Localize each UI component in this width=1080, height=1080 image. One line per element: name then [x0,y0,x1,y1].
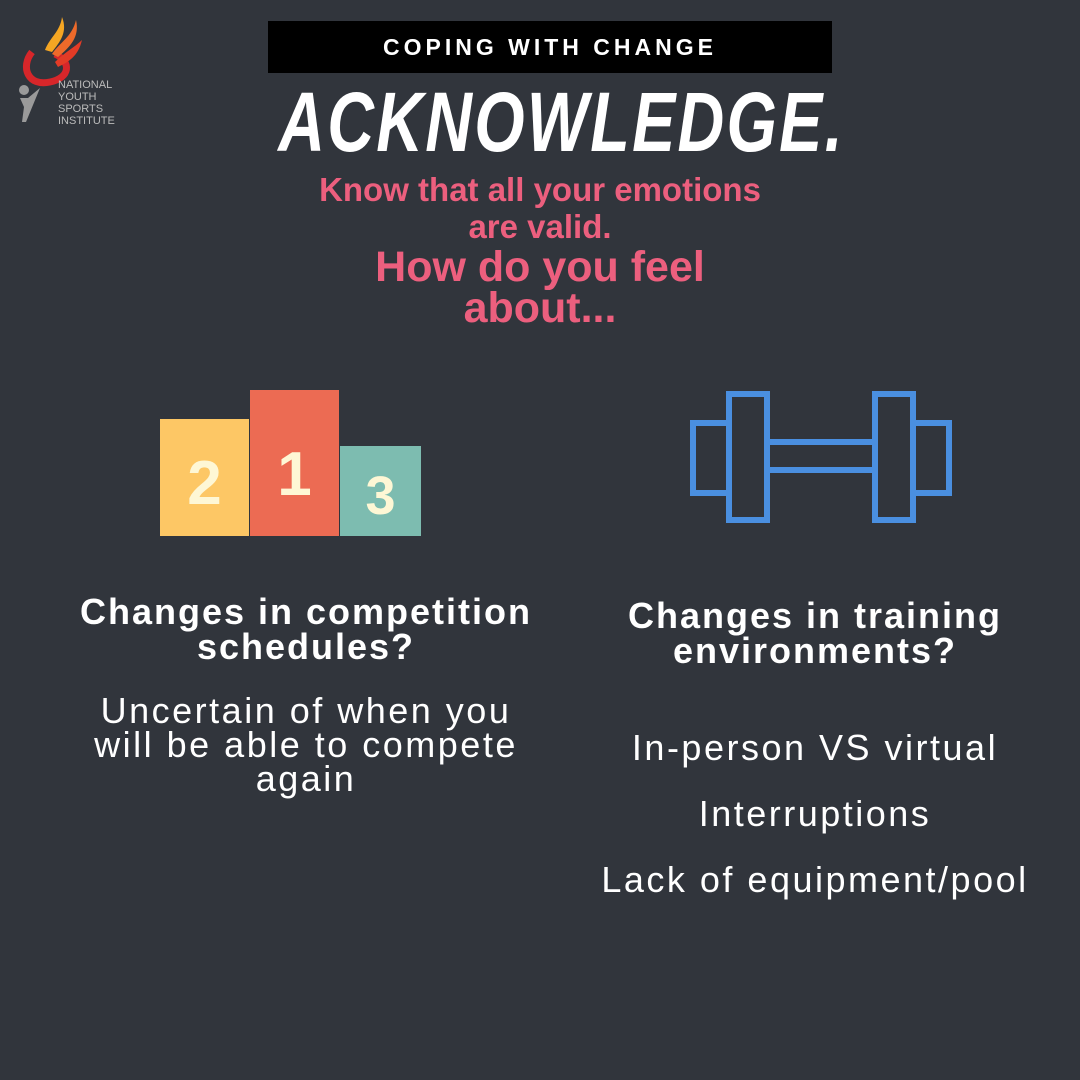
left body text [94,690,518,799]
right heading [628,595,1002,671]
icon: podium: 2 [187,449,222,518]
icon: dumbbell [690,391,952,523]
right body list: Lack of equipment/pool [601,859,1029,900]
right heading: environments? [673,630,957,671]
subtitle [319,171,761,245]
question heading [375,243,705,332]
left body text: again [256,758,356,799]
right body list: In-person VS virtual [632,727,998,768]
logo: YOUTH [58,91,97,103]
logo [19,17,115,127]
question heading: about... [464,284,616,332]
title: ACKNOWLEDGE. [278,75,845,169]
icon: podium [160,390,421,536]
right body list [601,727,1029,900]
right body list: Interruptions [699,793,931,834]
logo: NATIONAL [58,79,112,91]
question heading: How do you feel [375,243,705,291]
right heading: Changes in training [628,595,1002,636]
left heading: Changes in competition [80,591,532,632]
subtitle: Know that all your emotions [319,171,761,208]
left body text: Uncertain of when you [101,690,511,731]
banner: coping with change [268,21,832,73]
icon: podium: 3 [365,466,396,526]
banner: coping with change: COPING WITH CHANGE [383,34,717,60]
subtitle: are valid. [468,208,612,245]
left heading [80,591,532,667]
left body text: will be able to compete [94,724,518,765]
icon: podium: 1 [277,440,312,509]
left heading: schedules? [197,626,415,667]
logo: INSTITUTE [58,115,115,127]
logo: SPORTS [58,103,103,115]
